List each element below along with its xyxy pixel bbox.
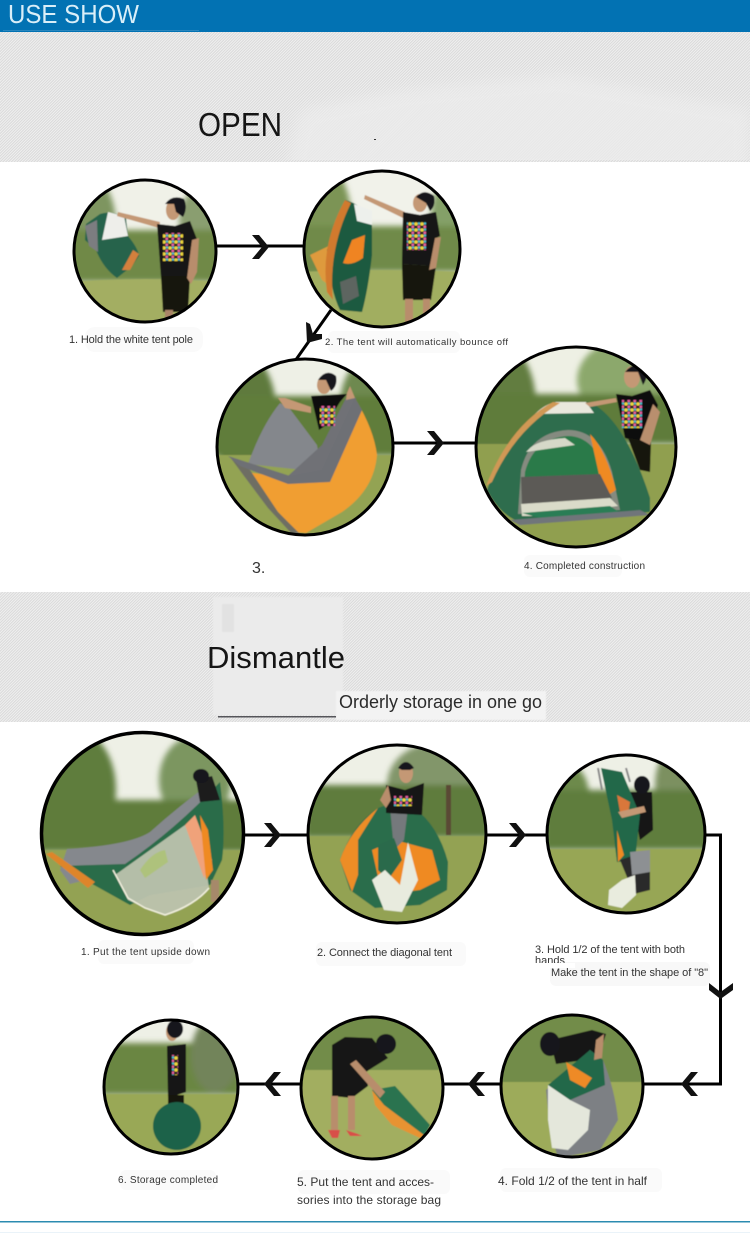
connector: step 1 to step 2 — [244, 823, 308, 847]
label: dismantle step 4: 4. Fold 1/2 of the tent in half — [498, 1174, 648, 1188]
photo: tent opened flat — [216, 358, 394, 536]
label: dismantle step 5: sories into the storage bag — [297, 1193, 441, 1207]
photo: put tent in storage bag — [298, 1014, 446, 1162]
photo: completed tent — [474, 346, 678, 548]
connector: step 2 to step 3 — [486, 823, 547, 847]
connector: step 4 to step 5 — [443, 1072, 501, 1096]
open heading band — [0, 32, 750, 175]
connector: step 3 to step 4 — [393, 431, 476, 455]
label: open step 2: 2. The tent will automatically bounce off — [325, 337, 508, 348]
label: dismantle step 3: 3. Hold 1/2 of the tent with both — [535, 944, 685, 956]
label: dismantle step 1: 1. Put the tent upside down — [81, 947, 210, 958]
dismantle heading: Dismantle — [207, 640, 345, 675]
label: dismantle step 5 — [297, 1175, 441, 1207]
photo: tent bounces off — [302, 170, 462, 328]
label: open step 4: 4. Completed construction — [524, 561, 645, 572]
connector: step 5 to step 6 — [238, 1072, 301, 1096]
photo: connect diagonal tent — [305, 742, 490, 927]
footer rule — [0, 1221, 750, 1222]
label: dismantle step 3 — [530, 944, 708, 979]
header bar — [0, 0, 750, 32]
photo: hold the white tent pole — [72, 178, 218, 324]
label: dismantle step 2: 2. Connect the diagonal tent — [317, 947, 452, 959]
panel: dismantle — [0, 592, 750, 1207]
label: dismantle step 6: 6. Storage completed — [118, 1175, 218, 1186]
collapsed tent ring — [340, 804, 448, 908]
label: dismantle step 5: 5. Put the tent and acces- — [297, 1175, 434, 1189]
label: open step 1: 1. Hold the white tent pole — [69, 334, 193, 346]
connector: step 1 to step 2 — [216, 235, 304, 259]
open heading: OPEN — [198, 106, 282, 143]
dismantle subheading: Orderly storage in one go — [339, 691, 542, 712]
step labels: open — [69, 327, 645, 577]
label: open step 3: 3. — [252, 560, 265, 577]
tent held up — [85, 213, 139, 278]
photo: hold half of tent — [546, 754, 706, 914]
photo: fold tent in half — [498, 1012, 648, 1162]
connector: step 3 around to step 4 — [644, 835, 733, 1096]
photo: storage completed — [101, 1017, 241, 1158]
tent body — [487, 402, 650, 522]
photo: tent upside down — [36, 730, 248, 940]
dismantle heading band — [0, 592, 750, 722]
step labels: dismantle — [81, 940, 710, 1207]
panel: open — [0, 32, 750, 577]
label: dismantle step 3: Make the tent in the shape of "8" — [551, 967, 708, 979]
label: dismantle step 3: hands — [535, 955, 565, 967]
connector: step 2 to step 3 — [295, 310, 331, 361]
